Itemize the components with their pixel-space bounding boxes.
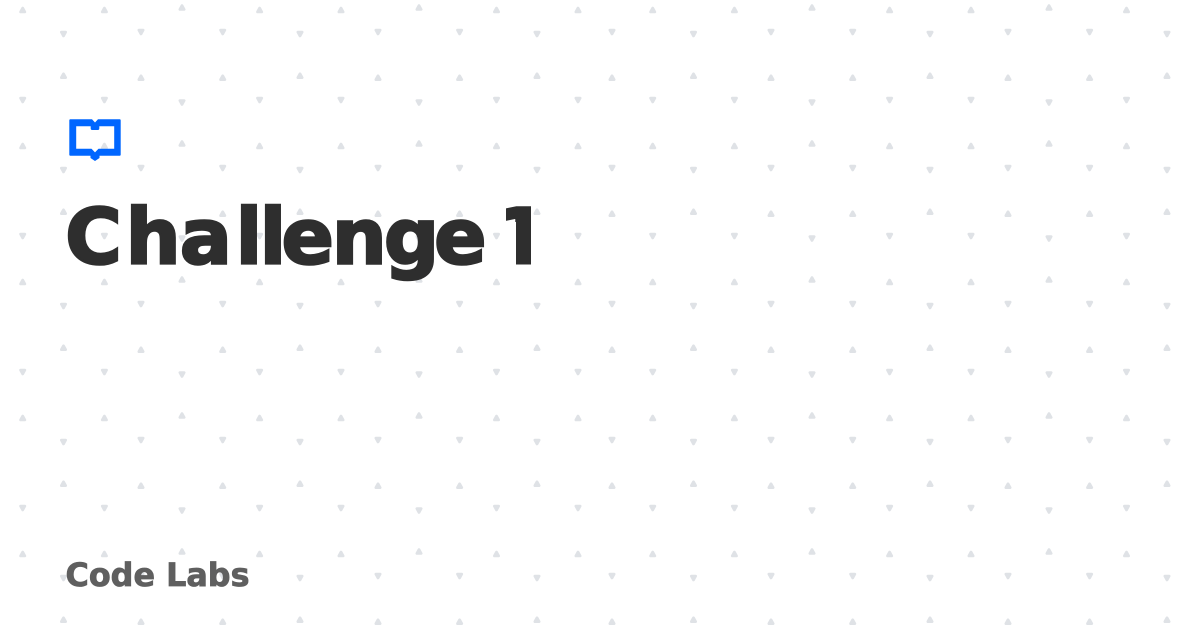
icon: open book xyxy=(69,119,121,161)
footer label: Code Labs xyxy=(66,556,250,594)
title: Challenge 1 xyxy=(65,194,548,282)
